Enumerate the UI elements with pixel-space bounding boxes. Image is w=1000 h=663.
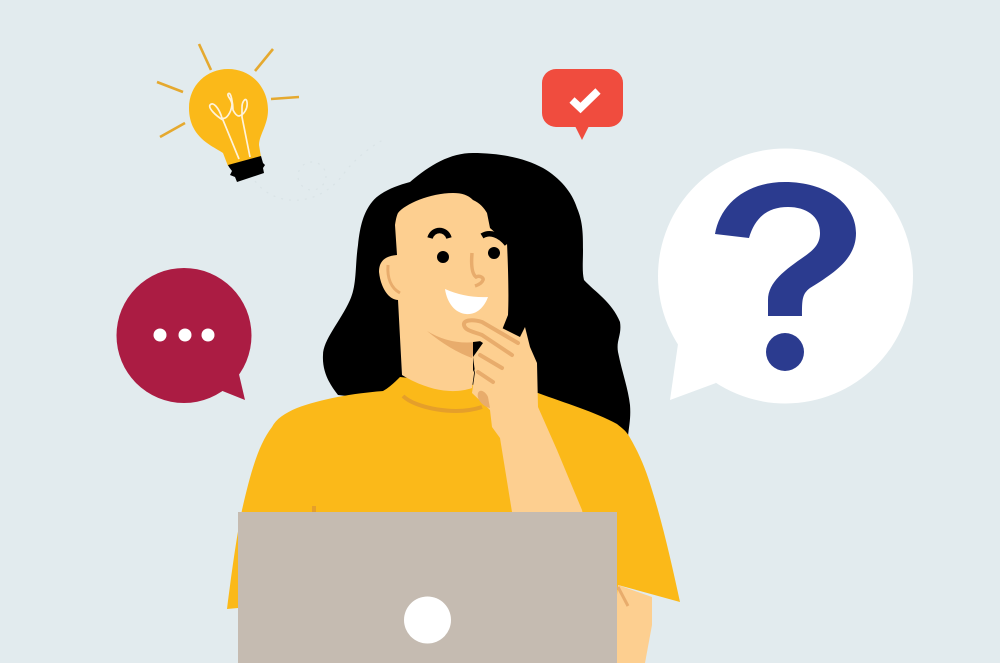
thumb nail (478, 391, 490, 408)
bulb rays (157, 44, 299, 137)
hair gap behind hand (473, 340, 490, 372)
sleeve mark (312, 506, 316, 514)
laptop (238, 512, 617, 663)
bulb filament (210, 93, 250, 159)
chin shadow (427, 331, 476, 358)
bulb glass (189, 69, 268, 166)
woman figure (227, 153, 680, 663)
ear line (388, 265, 400, 293)
question mark (715, 182, 856, 316)
nose (472, 253, 483, 286)
icon: question mark speech bubble (658, 148, 913, 404)
hair (323, 153, 630, 436)
smile (445, 289, 488, 314)
hand and forearm (463, 317, 586, 530)
shirt (227, 377, 680, 640)
eyes (437, 251, 449, 263)
icon: light bulb (157, 44, 299, 182)
neck and face (379, 193, 508, 391)
collar line (403, 396, 482, 411)
laptop logo (404, 596, 451, 644)
lower arm (610, 585, 652, 663)
arm crease (618, 587, 628, 606)
bulb base (228, 156, 265, 182)
icon: red check speech bubble (542, 69, 623, 140)
finger lines (464, 320, 518, 382)
eyebrows (430, 230, 449, 238)
icon: crimson speech bubble with dots (116, 268, 252, 403)
